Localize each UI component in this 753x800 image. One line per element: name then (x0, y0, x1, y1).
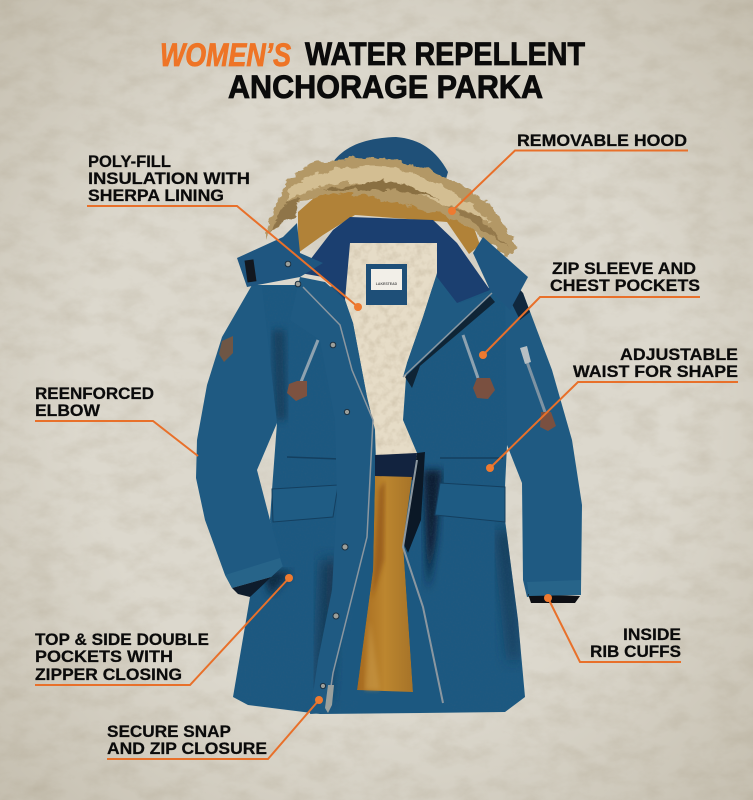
hood inner quilted lining (298, 185, 480, 254)
navy collar (300, 217, 490, 303)
parka body (233, 286, 525, 714)
snap buttons (285, 261, 350, 689)
neck label: LAKESTEAD (376, 282, 398, 286)
callout: insulation: SHERPA LINING (88, 186, 224, 205)
callout: reinforced elbow (35, 384, 198, 456)
lower lining: dark band and tan quilt (357, 453, 417, 692)
title: ANCHORAGE PARKA (228, 69, 543, 105)
callout: zip pockets: CHEST POCKETS (550, 276, 700, 295)
left chest pocket with leather tab (287, 340, 318, 401)
callout: zip pockets: ZIP SLEEVE AND (552, 259, 696, 278)
callout: reinforced elbow: REENFORCED (35, 384, 154, 403)
callout: adjustable waist: WAIST FOR SHAPE (573, 362, 738, 381)
zippers (303, 287, 492, 707)
neck label (366, 264, 407, 305)
waist flap pockets (272, 457, 505, 522)
jacket illustration (196, 137, 582, 714)
callout: pockets: ZIPPER CLOSING (35, 665, 182, 684)
callout: removable hood (448, 131, 688, 215)
callout: pockets: POCKETS WITH (35, 647, 173, 666)
callout: adjustable waist (486, 345, 738, 472)
right chest pocket with leather tab (463, 335, 495, 399)
callout: closure (107, 696, 323, 759)
opening: sherpa lining (345, 243, 437, 462)
right sleeve (490, 288, 582, 597)
hood shell (333, 137, 448, 200)
hood side flap (237, 223, 323, 287)
callout: closure: AND ZIP CLOSURE (107, 739, 267, 758)
sleeve cuffs (225, 558, 581, 603)
callout: insulation: POLY-FILL (88, 152, 171, 171)
left placket front (290, 277, 375, 714)
left sleeve (196, 285, 300, 588)
callout: rib cuffs (544, 594, 681, 662)
arm patch (219, 336, 233, 362)
bottom zipper pull (325, 685, 334, 713)
right collar flap (473, 237, 528, 310)
callout: rib cuffs: INSIDE (623, 625, 681, 644)
callout: rib cuffs: RIB CUFFS (590, 642, 681, 661)
callout: pockets (35, 574, 293, 685)
callout: pockets: TOP & SIDE DOUBLE (35, 630, 209, 649)
callout: adjustable waist: ADJUSTABLE (620, 345, 738, 364)
sleeve zip pocket with leather tab (520, 346, 556, 431)
callout: insulation: INSULATION WITH (88, 169, 250, 188)
jacket fabric grain (233, 286, 525, 714)
callout: removable hood: REMOVABLE HOOD (517, 131, 687, 150)
right front panel (403, 273, 490, 377)
callout: reinforced elbow: ELBOW (35, 401, 101, 420)
title (160, 36, 585, 105)
fur trim (265, 157, 518, 258)
callout: closure: SECURE SNAP (107, 722, 231, 741)
callout: zip pockets (479, 259, 700, 359)
body fold shadows (262, 330, 518, 700)
callout: insulation (87, 152, 362, 311)
title: WOMEN’S (160, 37, 292, 73)
title: WATER REPELLENT (305, 36, 585, 72)
